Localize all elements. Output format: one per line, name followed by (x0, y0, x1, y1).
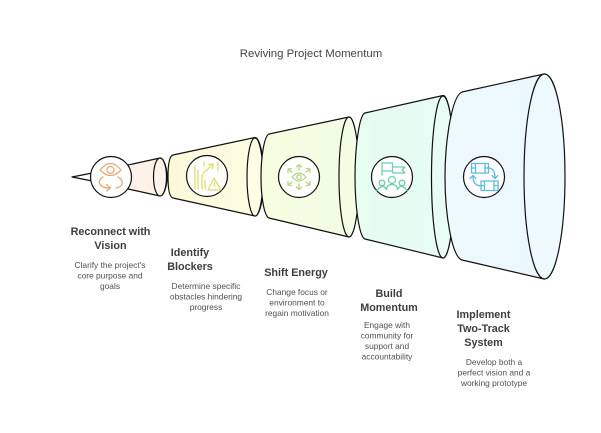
heading: System (464, 337, 503, 349)
description: support and (365, 341, 409, 351)
icon: eye with rotating arrows (90, 156, 132, 198)
heading: Momentum (360, 302, 418, 314)
icon: path with warning triangle (186, 156, 228, 196)
text: Build Momentum (360, 288, 418, 362)
description: goals (100, 281, 120, 291)
description: obstacles hindering (170, 292, 242, 302)
heading: Identify (171, 247, 209, 259)
description: accountability (362, 352, 413, 362)
icon: two swapping tracks (464, 156, 504, 198)
heading: Two-Track (457, 323, 511, 335)
heading: Blockers (167, 261, 213, 273)
funnel stage 3: Shift Energy (261, 117, 359, 237)
cone segment 4 (355, 95, 455, 258)
heading: Implement (456, 309, 511, 321)
description: perfect vision and a (458, 368, 531, 378)
cone segment 3 (261, 117, 359, 237)
title: Reviving Project Momentum (240, 48, 382, 60)
heading: Build (376, 288, 402, 300)
funnel stage 5: Implement Two-Track System (445, 74, 565, 279)
description: community for (361, 330, 414, 340)
icon: eye with outward arrows (278, 156, 320, 198)
description: regain motivation (265, 308, 329, 318)
cone segment 2 (168, 138, 264, 216)
description: Change focus or (266, 287, 328, 297)
cone segment 5 (445, 74, 565, 279)
description: environment to (269, 298, 325, 308)
funnel stage 1: Reconnect with Vision (72, 156, 167, 198)
description: Clarify the project's (75, 260, 145, 270)
text: Shift Energy (264, 267, 329, 318)
cone segment 1 (128, 158, 167, 196)
heading: Vision (94, 240, 127, 252)
heading: Reconnect with (71, 226, 150, 238)
funnel stage 4: Build Momentum (355, 95, 455, 258)
description: working prototype (460, 378, 527, 388)
text: Reconnect with Vision (71, 226, 150, 291)
text: Identify Blockers (167, 247, 242, 312)
description: progress (190, 302, 222, 312)
funnel stage 2: Identify Blockers (168, 138, 264, 216)
funnel tip (72, 172, 95, 182)
text: Implement Two-Track System (456, 309, 531, 388)
description: Develop both a (466, 357, 523, 367)
description: core purpose and (77, 270, 143, 280)
heading: Shift Energy (264, 267, 328, 279)
description: Determine specific (172, 281, 240, 291)
icon: flag and community (372, 156, 412, 198)
description: Engage with (364, 320, 410, 330)
